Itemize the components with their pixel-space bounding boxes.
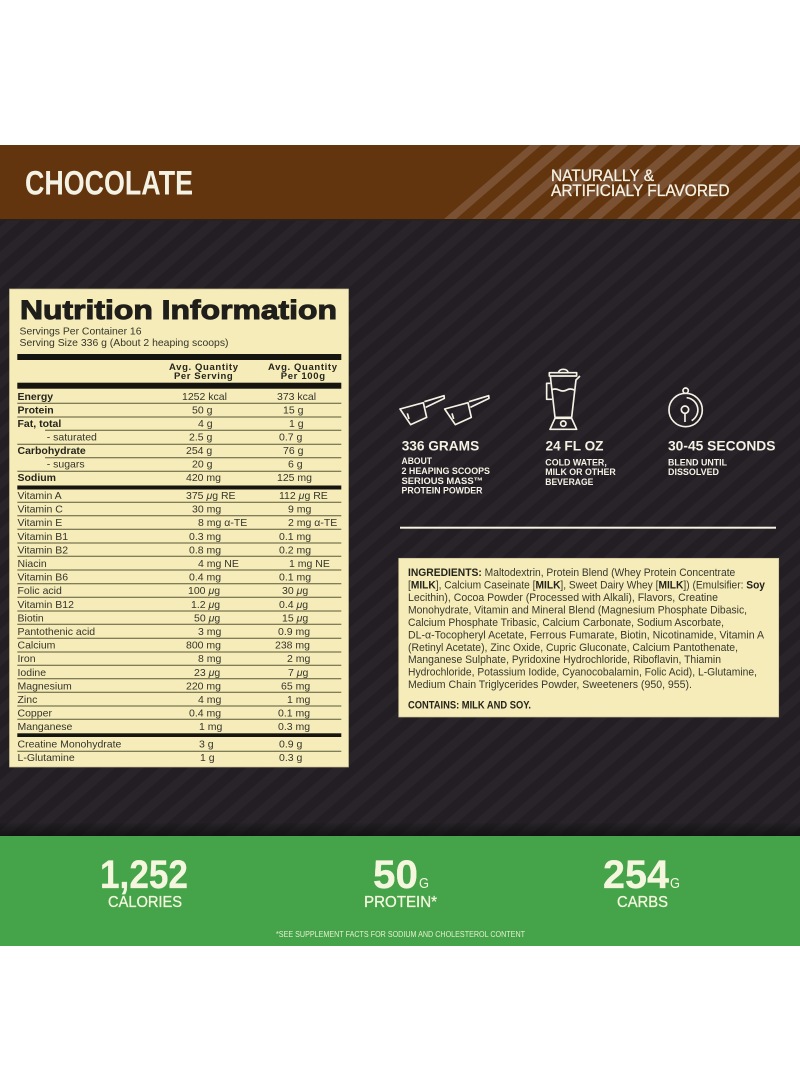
row: vitamin c: 9 mg <box>288 504 312 516</box>
table divider lines <box>17 403 341 751</box>
stat: protein: G <box>419 875 429 892</box>
row: fat: 4 g <box>198 418 213 430</box>
row: biotin: 50 μg <box>194 612 220 624</box>
ingredients text <box>408 567 765 691</box>
row: vitamin b2: Vitamin B2 <box>18 544 68 556</box>
row: pantothenic acid <box>18 626 310 638</box>
row: protein <box>18 404 304 416</box>
row: sugars <box>47 458 303 470</box>
row: iodine: 7 μg <box>288 667 309 679</box>
row: sodium: 420 mg <box>186 472 221 484</box>
row: vitamin e: Vitamin E <box>18 517 62 529</box>
flavor banner <box>0 145 800 219</box>
row: carbohydrate: Carbohydrate <box>18 445 86 457</box>
step: 336 grams: 2 HEAPING SCOOPS <box>402 466 491 477</box>
row: sugars: 20 g <box>192 458 213 470</box>
step: 24 fl oz: 24 FL OZ <box>546 438 604 454</box>
row: vitamin a: 375 μg RE <box>186 490 236 502</box>
row: manganese: 0.3 mg <box>278 721 310 733</box>
row: iron <box>18 653 311 665</box>
serving information: Serving Size 336 g (About 2 heaping scoops) <box>20 337 228 349</box>
row: protein: 15 g <box>283 404 304 416</box>
ingredients text: Monohydrate, Vitamin and Mineral Blend (Magnesium Phosphate Dibasic, <box>408 604 747 616</box>
row: biotin: Biotin <box>18 612 44 624</box>
row: vitamin c <box>18 504 312 516</box>
ingredients text: (Retinyl Acetate), Zinc Oxide, Cupric Gluconate, Calcium Pantothenate, <box>408 642 738 654</box>
row: zinc: 4 mg <box>198 694 222 706</box>
row: energy <box>18 391 316 403</box>
row: vitamin a: 112 μg RE <box>279 490 328 502</box>
nutrition heading: Nutrition Information <box>20 295 337 325</box>
row: vitamin b2 <box>18 544 311 556</box>
panel: ingredients <box>399 558 779 717</box>
row: saturated: 0.7 g <box>279 432 303 444</box>
stat: protein <box>364 853 437 911</box>
row: carbohydrate: 254 g <box>186 445 212 457</box>
stat: carbs: CARBS <box>617 894 668 911</box>
row: sodium: 125 mg <box>277 472 312 484</box>
row: vitamin b1: Vitamin B1 <box>18 531 68 543</box>
step: 30-45 seconds: 30-45 SECONDS <box>668 438 776 454</box>
row: saturated: 2.5 g <box>189 432 213 444</box>
row: vitamin b2: 0.2 mg <box>279 544 311 556</box>
row: saturated: - saturated <box>47 432 97 444</box>
row: creatine monohydrate: 0.9 g <box>279 738 303 750</box>
row: protein: Protein <box>18 404 54 416</box>
stat: carbs: G <box>670 875 680 892</box>
icon: timer <box>669 388 702 427</box>
icon: two scoops <box>400 396 489 425</box>
row: vitamin b12: 1.2 μg <box>191 599 220 611</box>
ingredients text: DL-α-Tocopheryl Acetate, Ferrous Fumarate, Biotin, Nicotinamide, Vitamin A <box>408 629 765 641</box>
row: folic acid: 30 μg <box>282 585 308 597</box>
row: vitamin c: 30 mg <box>192 504 221 516</box>
row: vitamin b12: Vitamin B12 <box>18 599 74 611</box>
row: sugars: 6 g <box>288 458 303 470</box>
table header: Avg. Quantity <box>169 362 239 373</box>
row: zinc <box>18 694 311 706</box>
row: copper: 0.4 mg <box>189 708 221 720</box>
stat: calories: 1,252 <box>100 853 188 897</box>
footnote: *SEE SUPPLEMENT FACTS FOR SODIUM AND CHOLESTEROL CONTENT <box>276 930 525 939</box>
step: 24 fl oz <box>545 438 616 488</box>
panel: green stats banner <box>0 836 800 946</box>
flavoring note <box>551 167 730 200</box>
row: iodine: 23 μg <box>194 667 220 679</box>
allergen statement: CONTAINS: MILK AND SOY. <box>408 700 531 712</box>
row: carbohydrate: 76 g <box>283 445 304 457</box>
icon: blender <box>547 369 580 429</box>
row: magnesium: 220 mg <box>186 680 221 692</box>
row: folic acid: Folic acid <box>18 585 62 597</box>
row: energy: Energy <box>18 391 53 403</box>
row: vitamin c: Vitamin C <box>18 504 63 516</box>
row: fat: Fat, total <box>18 418 61 430</box>
row: copper: 0.1 mg <box>278 708 310 720</box>
ingredients text: Hydrochloride, Potassium Iodide, Cyanocobalamin, Folic Acid), L-Glutamine, <box>408 667 757 679</box>
serving information: Servings Per Container 16 <box>20 326 142 338</box>
step: 24 fl oz: MILK OR OTHER <box>545 467 616 478</box>
row: l-glutamine: 0.3 g <box>279 752 303 764</box>
row: iron: 2 mg <box>287 653 311 665</box>
row: calcium: 800 mg <box>186 640 221 652</box>
row: magnesium: 65 mg <box>281 680 310 692</box>
step: 24 fl oz: BEVERAGE <box>545 477 594 488</box>
ingredients text: Lecithin), Cocoa Powder (Processed with Alkali), Flavors, Creatine <box>408 592 718 604</box>
row: l-glutamine <box>18 752 303 764</box>
flavor name: CHOCOLATE <box>25 164 193 202</box>
row: fat: 1 g <box>289 418 304 430</box>
step: 336 grams: ABOUT <box>402 456 432 467</box>
row: carbohydrate <box>18 445 304 457</box>
row: sugars: - sugars <box>47 458 85 470</box>
flavoring note: NATURALLY & <box>551 167 654 185</box>
row: vitamin b1: 0.1 mg <box>279 531 311 543</box>
row: zinc: Zinc <box>18 694 37 706</box>
ingredients text: Manganese Sulphate, Pyridoxine Hydrochloride, Riboflavin, Thiamin <box>408 654 721 666</box>
row: biotin <box>18 612 308 624</box>
row: manganese: 1 mg <box>199 721 223 733</box>
row: vitamin b12 <box>18 599 308 611</box>
row: vitamin b6: 0.4 mg <box>189 572 221 584</box>
row: creatine monohydrate: 3 g <box>199 738 214 750</box>
row: manganese <box>18 721 310 733</box>
row: sodium <box>18 472 312 484</box>
row: energy: 373 kcal <box>277 391 316 403</box>
table header: Avg. Quantity <box>268 362 338 373</box>
row: biotin: 15 μg <box>282 612 308 624</box>
row: folic acid <box>18 585 308 597</box>
stat: carbs <box>603 853 680 911</box>
row: vitamin e: 8 mg α-TE <box>198 517 247 529</box>
row: pantothenic acid: 3 mg <box>198 626 222 638</box>
row: vitamin b6: Vitamin B6 <box>18 572 68 584</box>
row: creatine monohydrate <box>18 738 303 750</box>
row: creatine monohydrate: Creatine Monohydrate <box>18 738 122 750</box>
row: pantothenic acid: Pantothenic acid <box>18 626 95 638</box>
table header: Per 100g <box>281 371 325 382</box>
row: iron: Iron <box>18 653 36 665</box>
table header <box>17 354 341 389</box>
row: vitamin b1 <box>18 531 311 543</box>
ingredients text: [MILK], Calcium Caseinate [MILK], Sweet Dairy Whey [MILK]) (Emulsifier: Soy <box>408 580 765 592</box>
table header: Per Serving <box>174 371 233 382</box>
stat: calories: CALORIES <box>108 894 182 911</box>
step: 336 grams: 336 GRAMS <box>402 438 479 454</box>
row: saturated <box>47 432 303 444</box>
row: niacin: 4 mg NE <box>198 558 239 570</box>
row: magnesium <box>18 680 310 692</box>
step: 24 fl oz: COLD WATER, <box>545 458 607 468</box>
stat: protein: PROTEIN* <box>364 894 437 911</box>
step: 30-45 seconds: BLEND UNTIL <box>668 458 727 468</box>
row: magnesium: Magnesium <box>18 680 72 692</box>
row: iodine <box>18 667 309 679</box>
row: manganese: Manganese <box>18 721 73 733</box>
row: iodine: Iodine <box>18 667 46 679</box>
stat: carbs: 254 <box>603 853 670 897</box>
row: copper: Copper <box>18 708 52 720</box>
row: niacin: Niacin <box>18 558 47 570</box>
row: calcium <box>18 640 310 652</box>
row: calcium: Calcium <box>18 640 56 652</box>
row: l-glutamine: 1 g <box>200 752 215 764</box>
row: protein: 50 g <box>192 404 213 416</box>
ingredients text: Medium Chain Triglycerides Powder, Sweeteners (950, 955). <box>408 679 692 691</box>
stat: calories <box>100 853 188 911</box>
row: sodium: Sodium <box>18 472 56 484</box>
ingredients text: INGREDIENTS: Maltodextrin, Protein Blend (Whey Protein Concentrate <box>408 567 735 579</box>
row: vitamin e <box>18 517 337 529</box>
row: pantothenic acid: 0.9 mg <box>278 626 310 638</box>
row: vitamin b1: 0.3 mg <box>189 531 221 543</box>
row: niacin: 1 mg NE <box>289 558 330 570</box>
step: 336 grams <box>402 438 491 496</box>
flavoring note: ARTIFICIALY FLAVORED <box>551 182 730 200</box>
step: 30-45 seconds: DISSOLVED <box>668 467 719 478</box>
row: niacin <box>18 558 330 570</box>
row: vitamin e: 2 mg α-TE <box>288 517 337 529</box>
row: iron: 8 mg <box>198 653 222 665</box>
dark striped background panel <box>0 219 800 836</box>
row: vitamin b12: 0.4 μg <box>279 599 308 611</box>
row: folic acid: 100 μg <box>188 585 220 597</box>
panel: nutrition information <box>10 289 348 767</box>
stat: protein: 50 <box>373 853 418 897</box>
row: vitamin b6: 0.1 mg <box>279 572 311 584</box>
row: energy: 1252 kcal <box>182 391 227 403</box>
row: vitamin a <box>18 490 328 502</box>
row: vitamin a: Vitamin A <box>18 490 62 502</box>
step: 30-45 seconds <box>668 438 776 478</box>
row: copper <box>18 708 310 720</box>
row: vitamin b2: 0.8 mg <box>189 544 221 556</box>
row: l-glutamine: L-Glutamine <box>18 752 75 764</box>
serving information <box>20 326 228 349</box>
row: fat <box>18 418 304 430</box>
table thick separators <box>17 486 341 737</box>
row: zinc: 1 mg <box>287 694 311 706</box>
row: vitamin b6 <box>18 572 311 584</box>
row: calcium: 238 mg <box>275 640 310 652</box>
step: 336 grams: SERIOUS MASS™ <box>402 476 483 487</box>
step: 336 grams: PROTEIN POWDER <box>402 486 483 496</box>
ingredients text: Calcium Phosphate Tribasic, Calcium Carbonate, Sodium Ascorbate, <box>408 617 724 629</box>
